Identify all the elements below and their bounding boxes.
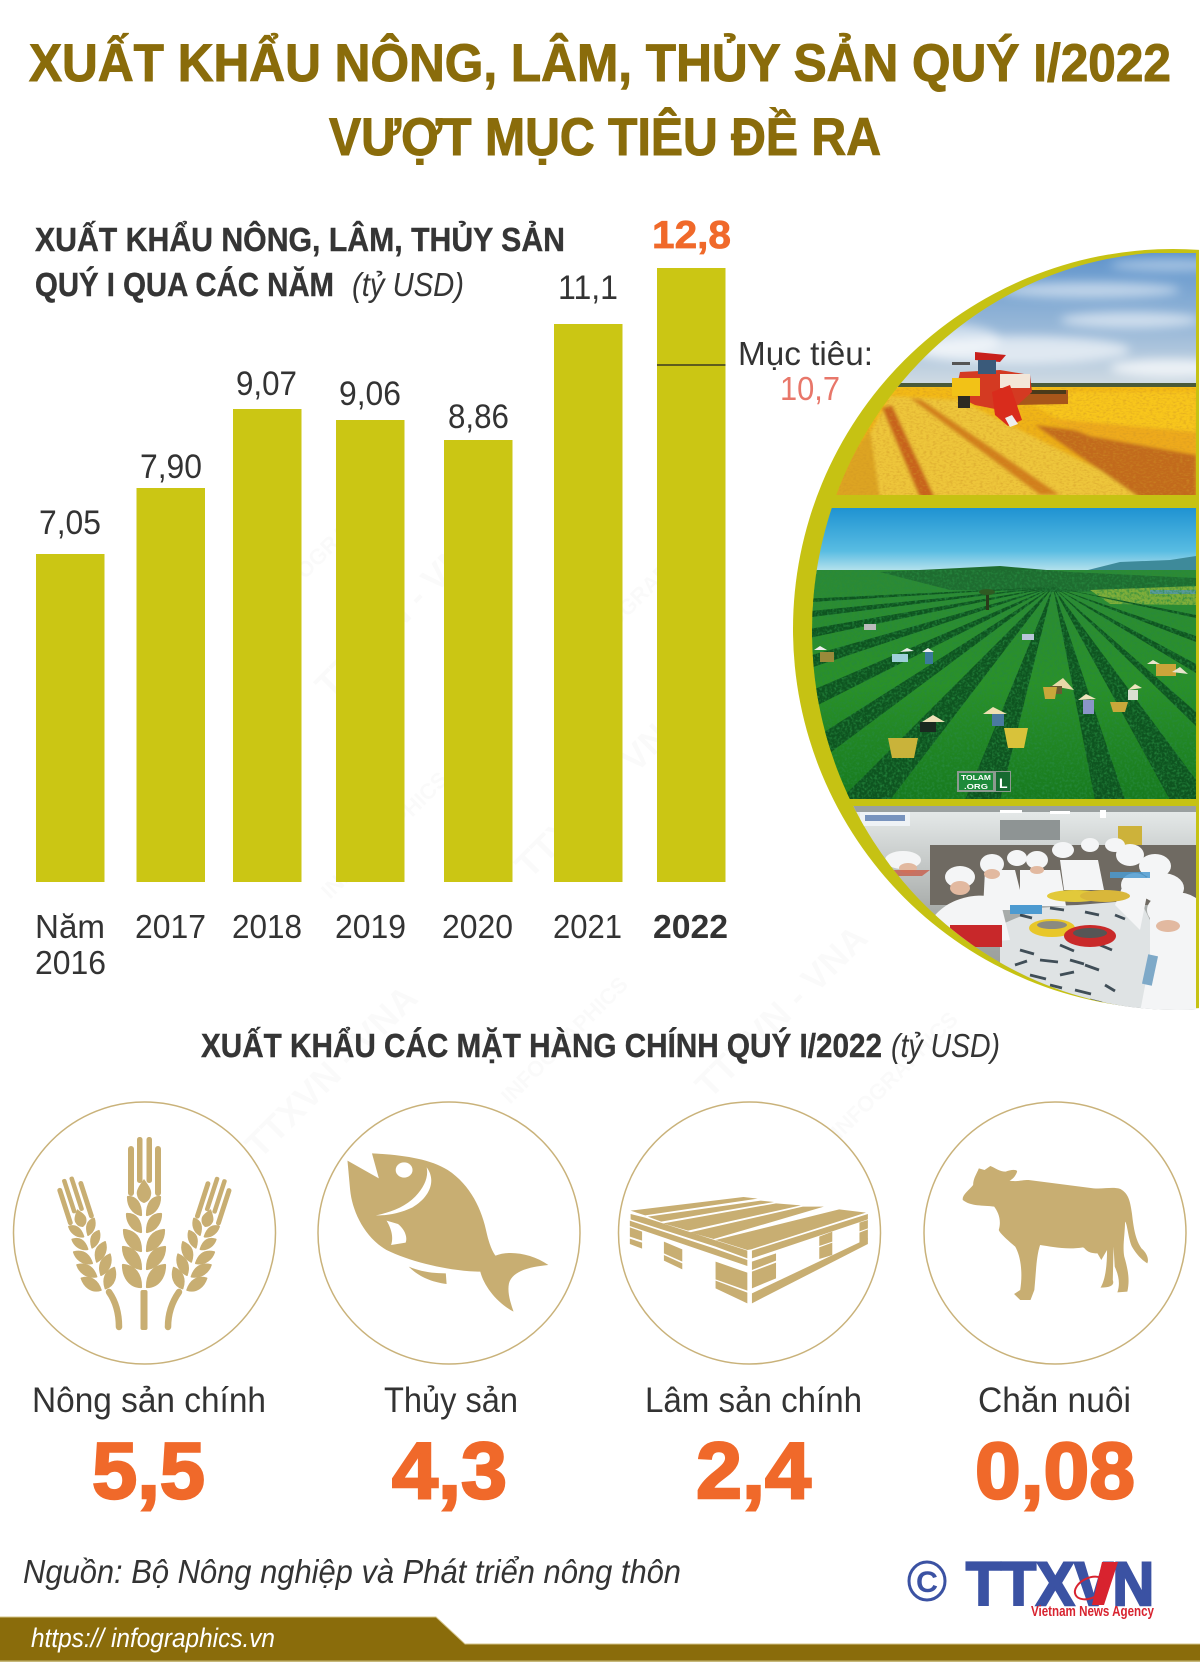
panel: seafood <box>318 1102 580 1515</box>
chart heading: QUÝ I QUA CÁC NĂM <box>35 266 334 303</box>
bar chart: exports by year <box>35 214 873 981</box>
icon: harvester <box>952 352 1068 427</box>
bar 2018 <box>233 365 302 882</box>
bar 2020: 8,86 <box>448 398 509 436</box>
text: INFOGRAPHICS <box>316 767 453 904</box>
bar 2022 with target line <box>652 214 731 882</box>
year axis labels: 2021 <box>553 908 622 945</box>
text: TTXVN - VNA <box>507 697 695 886</box>
section heading: main export goods: XUẤT KHẨU CÁC MẶT HÀNG CHÍNH QUÝ I/2022 <box>201 1027 882 1064</box>
year axis labels: 2022 <box>653 908 728 945</box>
target callout <box>738 335 873 407</box>
bar 2021: 11,1 <box>558 269 618 307</box>
bar 2022 with target line: 12,8 <box>652 214 731 257</box>
text: INFOGRAPHICS <box>576 522 713 659</box>
bar 2017: 7,90 <box>140 448 202 486</box>
icon: cow <box>963 1166 1148 1300</box>
text: TTXVN - VNA <box>237 977 425 1166</box>
url: https:// infographics.vn <box>31 1623 275 1653</box>
text: INFOGRAPHICS <box>826 1007 963 1144</box>
bar 2019: 9,06 <box>339 375 401 413</box>
section heading: main export goods: (tỷ USD) <box>891 1027 1000 1064</box>
label: agricultural products: Nông sản chính <box>32 1381 266 1420</box>
photo: tea hills <box>780 508 1196 800</box>
label: forestry products: Lâm sản chính <box>645 1381 862 1420</box>
panel: forestry <box>618 1102 880 1515</box>
target callout: 10,7 <box>780 370 840 407</box>
value: 2,4: 2,4 <box>696 1426 812 1515</box>
logo: TTXVN: TTXVN <box>966 1550 1154 1618</box>
value: 0,08: 0,08 <box>975 1426 1135 1515</box>
photo collage in crescent ring <box>780 249 1200 1012</box>
year axis labels: 2019 <box>335 908 406 945</box>
chart heading: XUẤT KHẨU NÔNG, LÂM, THỦY SẢN <box>35 220 565 258</box>
label: seafood: Thủy sản <box>384 1381 518 1420</box>
text: INFOGRAPHICS <box>266 472 403 609</box>
year axis labels <box>35 908 728 981</box>
bar 2016 <box>36 504 104 882</box>
value: 5,5: 5,5 <box>92 1426 205 1515</box>
label: livestock: Chăn nuôi <box>978 1381 1131 1420</box>
bar 2019 <box>336 375 404 882</box>
logo: Tolam: L <box>999 775 1008 791</box>
year axis labels: 2018 <box>232 908 302 945</box>
year axis labels: Năm <box>35 908 105 945</box>
workers and baskets <box>814 624 1188 758</box>
chart heading <box>35 220 565 303</box>
text: TTXVN - VNA <box>687 917 875 1106</box>
photo: rice harvester <box>836 253 1196 495</box>
target callout: Mục tiêu: <box>738 335 873 372</box>
bar 2018: 9,07 <box>236 365 297 403</box>
logo: TTXVN: C <box>916 1566 938 1599</box>
bar 2016: 7,05 <box>39 504 101 542</box>
bar 2020 <box>444 398 512 882</box>
footer bar with URL <box>0 1617 1200 1662</box>
value: 4,3: 4,3 <box>392 1426 507 1515</box>
title <box>29 32 1171 167</box>
bar 2021 <box>554 269 622 882</box>
icon: fish <box>347 1153 548 1312</box>
dark crowd background <box>930 845 1196 905</box>
panel: livestock <box>924 1102 1186 1515</box>
year axis labels: 2017 <box>135 908 206 945</box>
logo: Tolam <box>957 771 1011 792</box>
photo: seafood processing <box>853 806 1196 1010</box>
table with fish <box>1000 900 1196 1012</box>
baskets <box>950 872 1158 986</box>
title: VƯỢT MỤC TIÊU ĐỀ RA <box>329 106 881 167</box>
workers <box>885 838 1200 1012</box>
bar 2017 <box>136 448 205 882</box>
text: INFOGRAPHICS <box>496 972 633 1109</box>
icon: wooden pallet <box>630 1197 868 1303</box>
text: TTXVN - VNA <box>307 517 495 706</box>
source note: Nguồn: Bộ Nông nghiệp và Phát triển nông thôn <box>23 1553 681 1590</box>
panel: agriculture <box>14 1102 276 1515</box>
logo: Tolam: .ORG <box>964 784 989 791</box>
year axis labels: 2020 <box>442 908 513 945</box>
logo: TTXVN: Vietnam News Agency <box>1031 1603 1155 1620</box>
icon: wheat <box>51 1137 237 1330</box>
logo: Tolam: TOLAM <box>961 775 991 782</box>
chart heading: (tỷ USD) <box>352 266 464 303</box>
year axis labels: 2016 <box>35 944 106 981</box>
